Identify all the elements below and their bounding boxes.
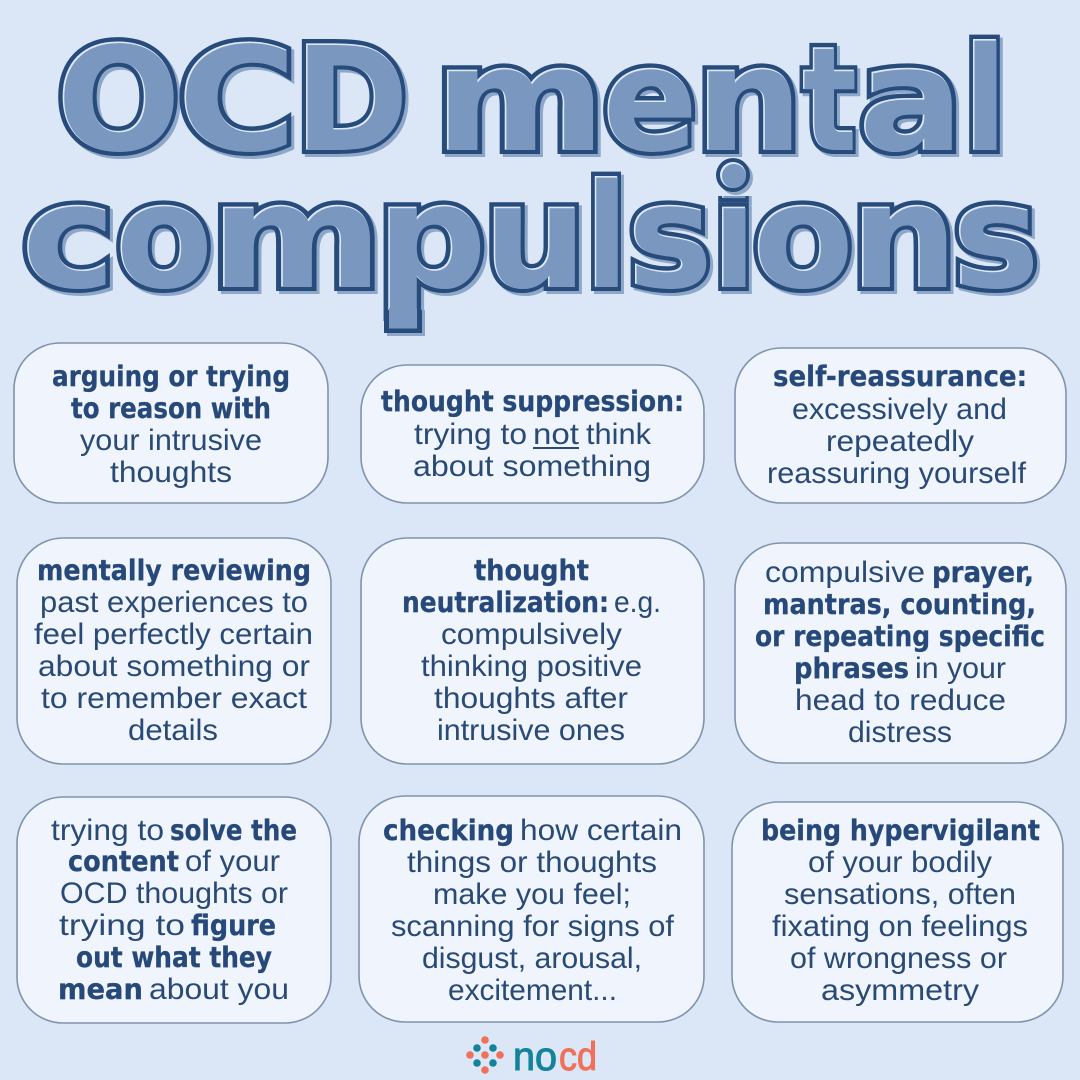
panel: being hypervigilant: sensations, often (784, 878, 1016, 911)
title: n (696, 16, 803, 184)
title: m (437, 18, 608, 186)
title: n (850, 152, 957, 320)
title: n (698, 18, 805, 186)
panel: thought neutralization: compulsively (441, 618, 622, 651)
panel: being hypervigilant: of your bodily (808, 846, 992, 879)
panel: thought neutralization: thinking positive (421, 650, 642, 683)
panel: compulsive prayer and mantras: head to reduce (795, 684, 1006, 717)
panel: thought neutralization: neutralization: (402, 586, 609, 619)
title: l (585, 152, 627, 320)
title: o (118, 155, 215, 323)
panel: self-reassurance: reassuring yourself (767, 457, 1027, 490)
panel: solving the content: mean (58, 973, 143, 1006)
panel: thought suppression: not (533, 418, 580, 451)
panel: compulsive prayer and mantras: mantras, counting, (763, 588, 1036, 621)
panel: solving the content: trying to (59, 909, 185, 942)
panel: thought neutralization: thought (474, 554, 589, 587)
title: m (435, 16, 606, 184)
panel: being hypervigilant: of wrongness or (790, 942, 1007, 975)
title: m (213, 155, 385, 323)
panel: thought suppression (361, 365, 704, 503)
title: s (628, 153, 713, 321)
panel: checking: disgust, arousal, (422, 942, 642, 975)
title: p (376, 152, 486, 320)
title: e (602, 15, 697, 183)
panel: compulsive prayer and mantras: compulsive (765, 556, 925, 589)
panel: solving the content: OCD thoughts or (60, 877, 288, 910)
title: u (486, 155, 589, 323)
panel: mentally reviewing (17, 538, 331, 764)
title: C (177, 15, 296, 183)
panel: being hypervigilant: asymmetry (821, 974, 979, 1007)
title: D (294, 15, 408, 183)
panel: being hypervigilant: fixating on feelings (772, 910, 1028, 943)
panel: thought neutralization: e.g. (614, 586, 661, 619)
title: s (953, 153, 1040, 321)
panel: compulsive prayer and mantras: prayer, (932, 556, 1034, 589)
panel: thought suppression: trying to (414, 418, 527, 451)
title: c (24, 155, 118, 323)
panel: thought neutralization (361, 538, 704, 764)
title: s (955, 155, 1042, 323)
title: a (858, 15, 963, 183)
title: s (627, 152, 712, 320)
title: m (211, 153, 383, 321)
title: n (695, 15, 802, 183)
panel: checking: scanning for signs of (391, 910, 675, 943)
title: c (22, 153, 116, 321)
title: p (377, 153, 487, 321)
title: t (802, 15, 856, 183)
title: u (483, 152, 586, 320)
title: D (295, 16, 409, 184)
title: t (802, 15, 856, 183)
panel: thought neutralization: intrusive ones (437, 714, 625, 747)
title: o (752, 152, 853, 320)
title: D (297, 18, 411, 186)
title: o (753, 153, 854, 321)
title: i (712, 152, 755, 320)
title: l (585, 152, 627, 320)
panel: checking: checking (383, 814, 514, 847)
title: O (56, 15, 180, 183)
title: n (851, 153, 958, 321)
panel: self-reassurance: repeatedly (826, 425, 974, 458)
title: i (712, 152, 755, 320)
panel: compulsive prayer and mantras: phrases (794, 652, 909, 685)
panel: checking: how certain (520, 814, 682, 847)
icon: dot cluster (466, 1036, 504, 1074)
title: n (695, 15, 802, 183)
title: a (859, 16, 964, 184)
panel: arguing with intrusive thoughts: arguing or trying (52, 360, 290, 393)
panel: compulsive prayer and mantras (735, 543, 1066, 763)
title: i (715, 155, 758, 323)
panel: mentally reviewing: details (128, 714, 218, 747)
panel: thought suppression: think (586, 418, 652, 451)
title: u (484, 153, 587, 321)
panel: solving the content: solve the (170, 814, 297, 847)
title: a (858, 15, 963, 183)
panel: self-reassurance (735, 348, 1066, 503)
title: C (180, 18, 299, 186)
panel: solving the content: figure (191, 909, 276, 942)
title: o (115, 152, 212, 320)
panel: being hypervigilant: being hypervigilant (761, 814, 1040, 847)
title: o (755, 155, 856, 323)
title: p (376, 152, 486, 320)
title: c (21, 152, 115, 320)
title: s (630, 155, 715, 323)
panel: checking: things or thoughts (407, 846, 657, 879)
title: e (603, 16, 698, 184)
title: e (602, 15, 697, 183)
panel: thought suppression: about something (413, 450, 651, 483)
panel: mentally reviewing: mentally reviewing (37, 554, 311, 587)
panel: checking: make you feel; (433, 878, 631, 911)
panel: compulsive prayer and mantras: distress (848, 716, 952, 749)
panel: solving the content: trying to (51, 814, 164, 847)
title: O (59, 18, 183, 186)
panel: checking: excitement... (448, 974, 617, 1007)
panel: mentally reviewing: past experiences to (40, 586, 308, 619)
title: l (588, 155, 630, 323)
logo: nocd: cd (559, 1035, 597, 1079)
title: t (803, 16, 857, 184)
title: l (966, 18, 1009, 186)
panel: thought neutralization: thoughts after (434, 682, 628, 715)
panel: solving the content (17, 797, 331, 1023)
panel: mentally reviewing: about something or (38, 650, 310, 683)
title: n (850, 152, 957, 320)
panel: self-reassurance: excessively and (792, 393, 1007, 426)
panel: mentally reviewing: to remember exact (41, 682, 308, 715)
title: t (805, 18, 859, 186)
title: l (963, 15, 1006, 183)
title: m (210, 152, 382, 320)
title: D (294, 15, 408, 183)
panel: arguing with intrusive thoughts: thoughts (110, 456, 232, 489)
title: O (56, 15, 180, 183)
panel: being hypervigilant (732, 802, 1063, 1022)
panel: self-reassurance: self-reassurance: (773, 360, 1027, 393)
title: l (963, 15, 1006, 183)
title: s (952, 152, 1039, 320)
title: u (483, 152, 586, 320)
panel: solving the content: of your (185, 845, 280, 878)
title: s (952, 152, 1039, 320)
title: m (434, 15, 605, 183)
panel: checking (359, 796, 704, 1022)
panel: arguing with intrusive thoughts: your intrusive (80, 424, 262, 457)
title: C (178, 16, 297, 184)
title: m (210, 152, 382, 320)
title: o (752, 152, 853, 320)
panel: compulsive prayer and mantras: or repeating specific (755, 620, 1045, 653)
logo: nocd: no (513, 1035, 557, 1079)
title: s (627, 152, 712, 320)
title: l (964, 16, 1007, 184)
title: o (115, 152, 212, 320)
title: p (379, 155, 489, 323)
panel: solving the content: out what they (76, 941, 272, 974)
panel: solving the content: about you (149, 973, 289, 1006)
title: C (177, 15, 296, 183)
panel: arguing with intrusive thoughts: to reason with (71, 392, 271, 425)
title: n (853, 155, 960, 323)
panel: compulsive prayer and mantras: in your (915, 652, 1006, 685)
title: a (861, 18, 966, 186)
title: m (434, 15, 605, 183)
title: o (116, 153, 213, 321)
title: O (57, 16, 181, 184)
title: e (605, 18, 700, 186)
panel: solving the content: content (68, 845, 179, 878)
panel: mentally reviewing: feel perfectly certain (34, 618, 313, 651)
title: i (713, 153, 756, 321)
panel: arguing with intrusive thoughts (14, 343, 328, 503)
title: l (586, 153, 628, 321)
title (21, 15, 1042, 336)
logo: nocd (466, 1035, 597, 1079)
title: c (21, 152, 115, 320)
panel: thought suppression: thought suppression: (381, 385, 684, 418)
